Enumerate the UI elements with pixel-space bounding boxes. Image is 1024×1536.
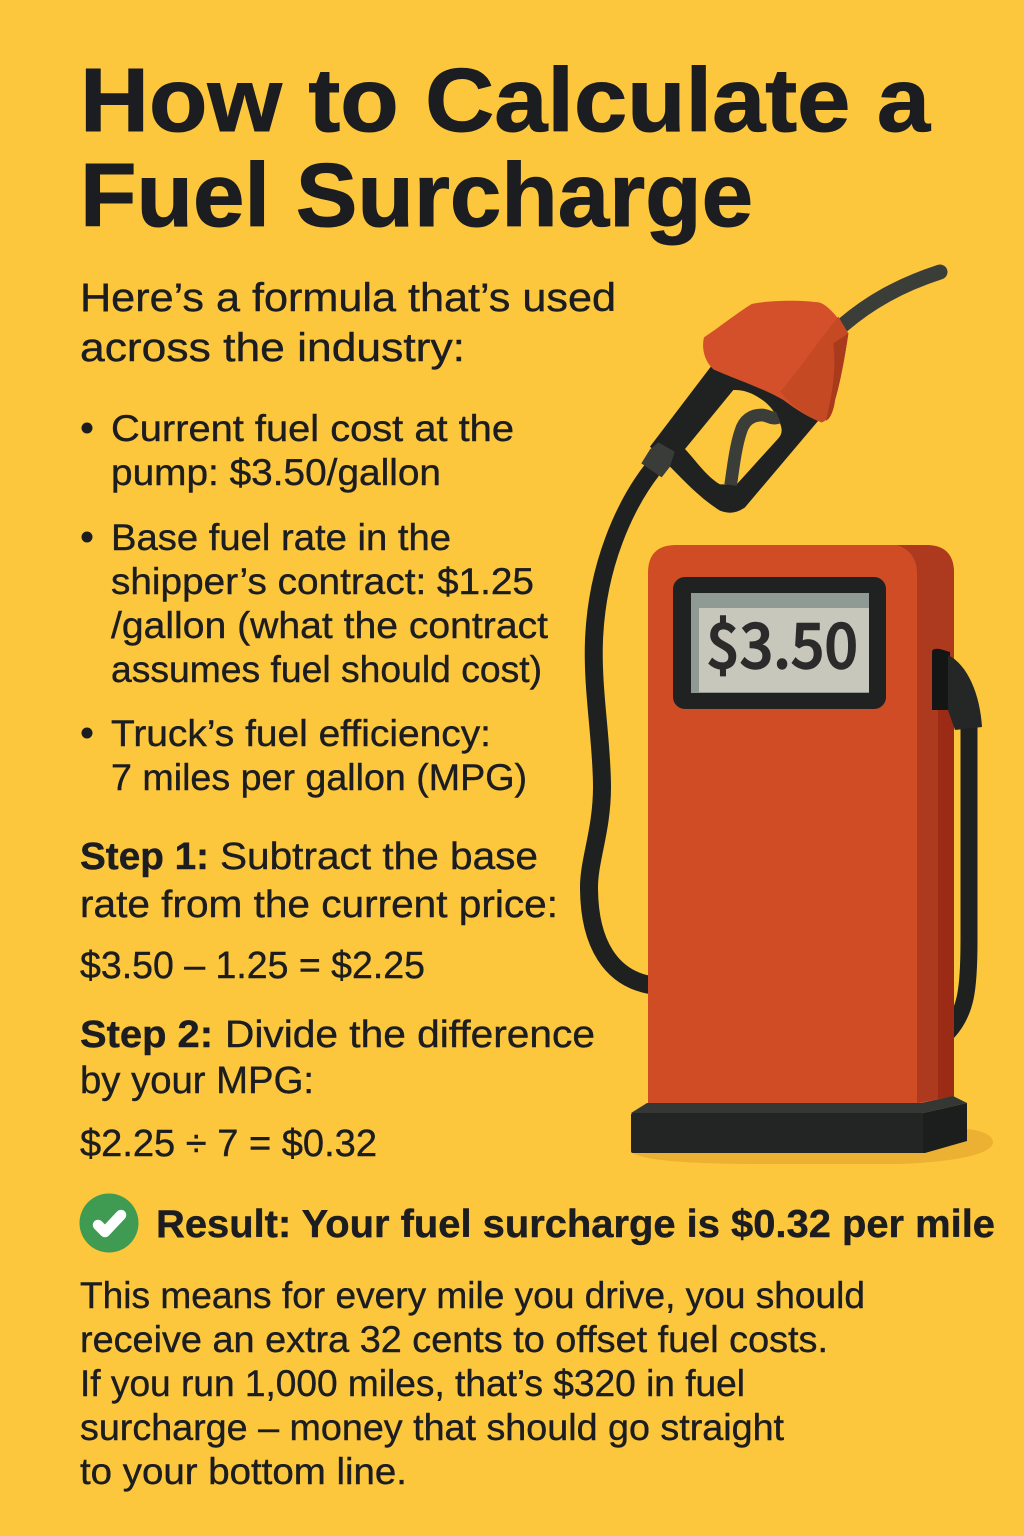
pump body xyxy=(648,545,954,1103)
intro text xyxy=(80,276,616,370)
fuel nozzle xyxy=(641,301,848,513)
bullet: current fuel cost: Current fuel cost at the xyxy=(111,408,514,449)
hose end above nozzle xyxy=(843,272,940,325)
step 2 xyxy=(80,1014,595,1165)
bullet: truck fuel efficiency: 7 miles per gallon (MPG) xyxy=(111,757,527,798)
closing paragraph: If you run 1,000 miles, that’s $320 in fuel xyxy=(80,1363,745,1404)
closing paragraph: to your bottom line. xyxy=(80,1451,407,1492)
step 2: Divide the difference xyxy=(225,1014,595,1056)
bullet: current fuel cost xyxy=(82,408,514,493)
step 1: $3.50 – 1.25 = $2.25 xyxy=(80,945,425,987)
bullet: truck fuel efficiency xyxy=(82,713,527,798)
pump holster xyxy=(932,649,982,730)
bullet: base fuel rate: shipper’s contract: $1.25 xyxy=(111,561,534,602)
step 2: $2.25 ÷ 7 = $0.32 xyxy=(80,1123,377,1165)
price display xyxy=(673,577,886,709)
hose collar xyxy=(641,442,675,477)
closing paragraph: This means for every mile you drive, you should xyxy=(80,1275,865,1316)
closing paragraph: receive an extra 32 cents to offset fuel costs. xyxy=(80,1319,828,1360)
bullet: current fuel cost: pump: $3.50/gallon xyxy=(111,452,441,493)
step 2: by your MPG: xyxy=(80,1060,314,1102)
step 1 xyxy=(80,836,558,987)
bullet: base fuel rate xyxy=(82,517,549,690)
nozzle handle xyxy=(650,363,818,513)
step 1: rate from the current price: xyxy=(80,884,558,926)
trigger xyxy=(731,415,778,485)
intro text: Here’s a formula that’s used xyxy=(80,276,616,320)
step 1: Step 1: xyxy=(80,836,209,878)
bullet: base fuel rate: /gallon (what the contract xyxy=(111,605,549,646)
right side hose xyxy=(948,720,969,1032)
step 1: Subtract the base xyxy=(220,836,538,878)
title: How to Calculate a xyxy=(80,51,931,151)
closing paragraph xyxy=(80,1275,865,1492)
result line: Result: Your fuel surcharge is $0.32 per mile xyxy=(156,1203,995,1246)
delivery hose xyxy=(589,470,652,985)
bullet: truck fuel efficiency: Truck’s fuel efficiency: xyxy=(111,713,491,754)
closing paragraph: surcharge – money that should go straight xyxy=(80,1407,785,1448)
icon: green check xyxy=(80,1194,138,1252)
nozzle cover xyxy=(703,301,848,422)
pump base xyxy=(631,1096,967,1153)
pump shadow xyxy=(632,1129,993,1164)
illustration: fuel pump xyxy=(589,272,993,1164)
title: Fuel Surcharge xyxy=(80,146,753,246)
price display: $3.50 xyxy=(706,596,858,686)
bullet: base fuel rate: assumes fuel should cost) xyxy=(111,649,542,690)
bullet: base fuel rate: Base fuel rate in the xyxy=(111,517,451,558)
intro text: across the industry: xyxy=(80,326,465,370)
title xyxy=(80,51,931,246)
step 2: Step 2: xyxy=(80,1014,213,1056)
